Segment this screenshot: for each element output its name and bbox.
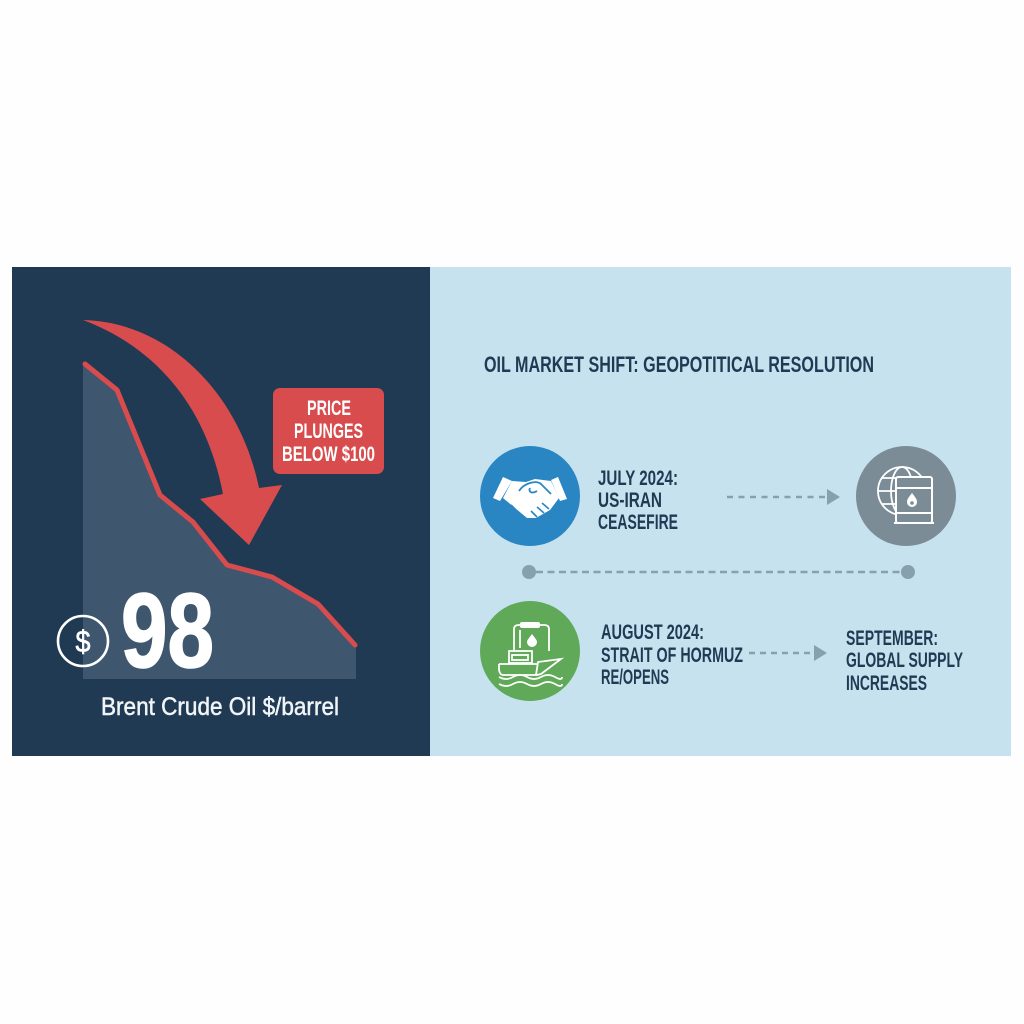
panel: price chart (12, 267, 430, 756)
icon: globe and oil barrel (856, 446, 956, 546)
big price number: 98 (121, 572, 214, 690)
icon: handshake (480, 446, 580, 546)
icon: tanker ship (480, 601, 580, 701)
step text: August 2024: AUGUST 2024: (601, 621, 704, 644)
step text: September: GLOBAL SUPPLY (846, 649, 963, 672)
step text: July 2024: JULY 2024: (598, 467, 678, 490)
step text: August 2024 (601, 621, 743, 689)
callout: price plunges: PRICE (307, 397, 351, 420)
icon: dollar circle (58, 616, 108, 666)
step text: September: INCREASES (846, 672, 927, 695)
step text: July 2024 (598, 467, 678, 534)
step text: September: SEPTEMBER: (846, 627, 938, 650)
step text: September (846, 627, 963, 695)
arrow: August to September (749, 645, 827, 661)
callout: price plunges: BELOW $100 (282, 443, 375, 466)
step text: August 2024: STRAIT OF HORMUZ (601, 644, 743, 667)
arrow: large downward red arrow (83, 320, 282, 545)
chart caption: Brent Crude Oil $/barrel (101, 693, 339, 721)
step text: August 2024: RE/OPENS (601, 666, 669, 689)
panel: timeline (430, 267, 1011, 756)
chart: area under price line (83, 363, 356, 679)
icon: dollar circle: $ (76, 624, 90, 659)
step text: July 2024: US-IRAN (598, 489, 662, 512)
step text: July 2024: CEASEFIRE (598, 511, 678, 534)
heading: OIL MARKET SHIFT: GEOPOTITICAL RESOLUTION (484, 352, 874, 377)
timeline connector with end dots (522, 565, 915, 579)
chart: falling price line (85, 364, 355, 645)
callout: price plunges (273, 388, 384, 474)
arrow: July to oil supply (727, 489, 840, 505)
callout: price plunges: PLUNGES (294, 420, 363, 443)
